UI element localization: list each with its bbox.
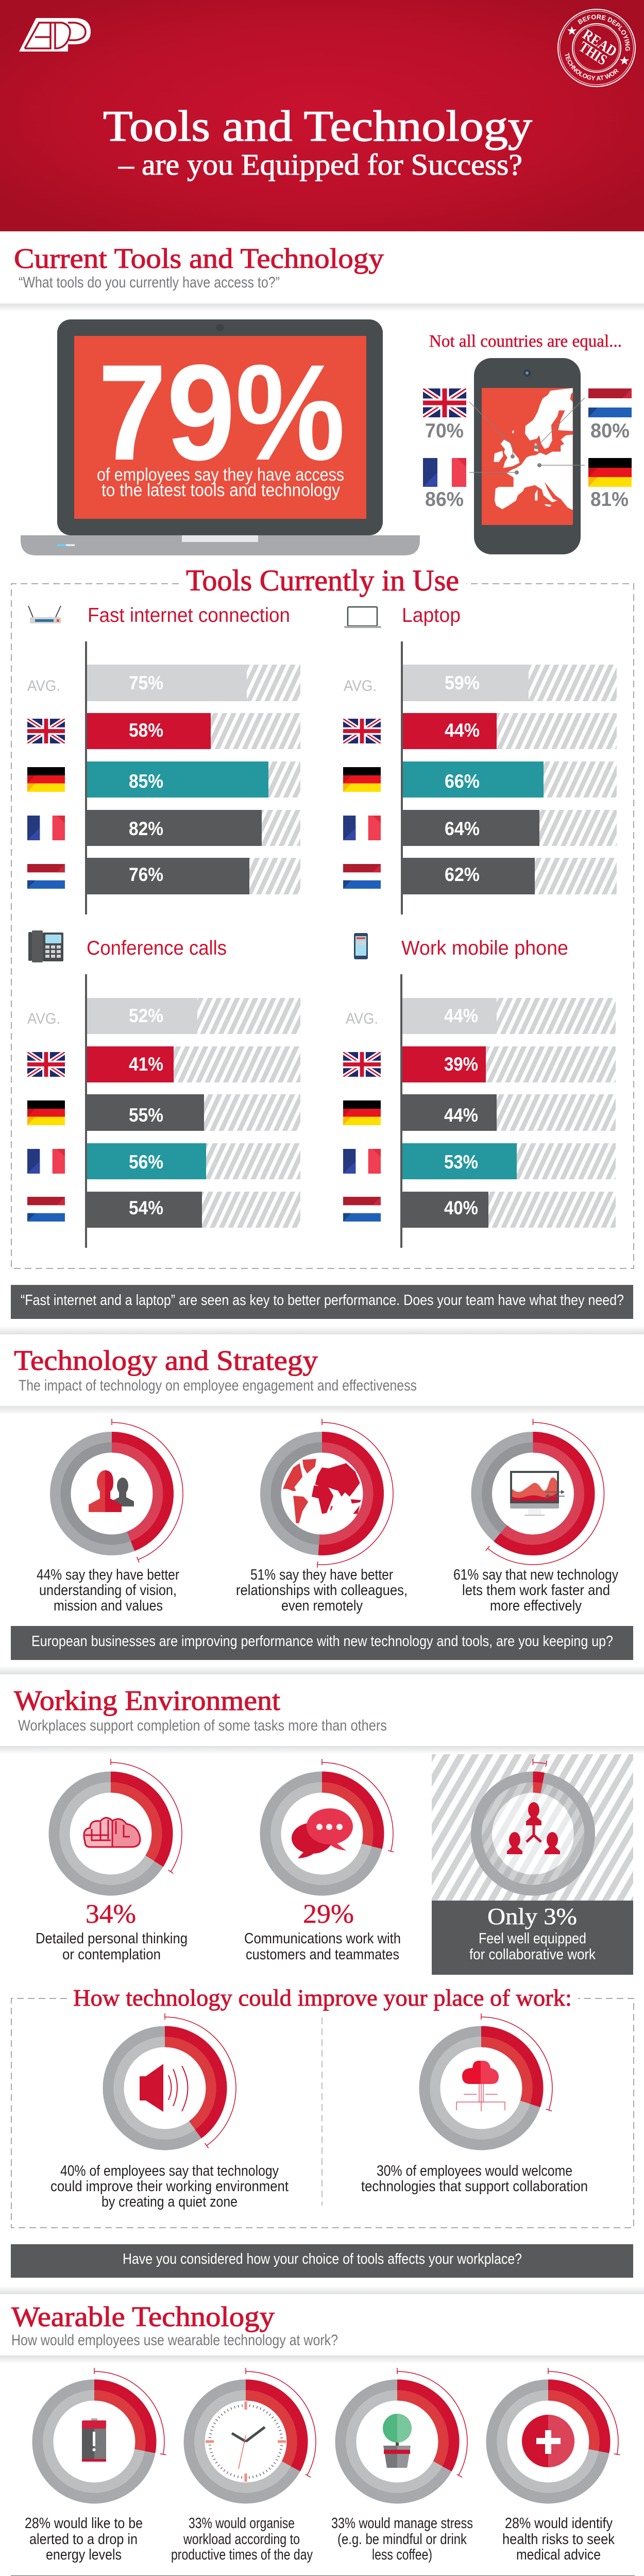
chart: fast internet connection: 58% <box>129 720 163 741</box>
flag: Netherlands 80%: 80% <box>590 420 630 442</box>
donut: 33% organise workload <box>171 2368 316 2563</box>
panel: current tools heading: “What tools do you currently have access to?” <box>19 274 280 291</box>
logo: ADP <box>19 18 91 52</box>
text: 40%: 40% of employees say that technology <box>60 2163 279 2179</box>
country comparison phone: Not all countries are equal... <box>429 332 622 351</box>
callout: wearable tech <box>11 2575 635 2576</box>
text: 33% stress: 33% would manage stress <box>331 2515 473 2532</box>
donut: 34% personal thinking <box>36 1759 188 1963</box>
text: 33% organise: workload according to <box>183 2531 300 2548</box>
chart: conference calls: Conference calls <box>87 937 227 959</box>
donut: 28% energy levels <box>24 2368 166 2563</box>
chart: work mobile phone: AVG. <box>346 1010 378 1027</box>
flag: France 86%: 86% <box>425 488 464 511</box>
text: 40% <box>50 2163 289 2210</box>
chart: laptop: 62% <box>445 864 480 885</box>
callout: fast internet <box>11 1285 633 1319</box>
panel: working environment heading: Workplaces support completion of some tasks more than others <box>18 1717 387 1734</box>
flag: Germany 81% <box>588 458 632 511</box>
text: 28% health: medical advice <box>516 2547 601 2563</box>
icon: chat bubbles <box>292 1808 353 1858</box>
flag: Netherlands 80% <box>588 388 632 442</box>
chart: fast internet connection: 82% <box>129 818 163 839</box>
flag: France 86% <box>423 458 466 511</box>
text: 44%: mission and values <box>54 1598 163 1614</box>
panel: technology and strategy heading: Technology and Strategy <box>14 1345 318 1376</box>
text: 61%: lets them work faster and <box>462 1582 610 1599</box>
map: Europe <box>494 388 573 510</box>
text: 61%: more effectively <box>490 1598 582 1614</box>
icon: three people network <box>507 1802 560 1854</box>
flag: Germany 81%: 81% <box>590 488 629 511</box>
panel: technology and strategy heading <box>0 1326 644 1414</box>
chart: fast internet connection: 75% <box>129 672 163 693</box>
panel: current tools heading <box>0 243 644 312</box>
chart: laptop: Laptop <box>402 604 461 626</box>
stat: 34%: 34% <box>86 1900 136 1929</box>
stamp: read this <box>557 9 636 87</box>
panel: technology and strategy heading: The impact of technology on employee engagement and effectiveness <box>19 1377 417 1394</box>
panel: how technology could improve <box>11 1985 634 2228</box>
stat: 29%: customers and teammates <box>246 1946 399 1963</box>
laptop with 79%: 79% <box>98 336 345 489</box>
text: 33% organise: productive times of the day <box>171 2547 313 2563</box>
callout: choice of tools <box>11 2244 633 2278</box>
text: 33% organise: 33% would organise <box>189 2515 295 2532</box>
panel: header <box>0 0 644 231</box>
box: only 3%: Only 3% <box>487 1903 577 1929</box>
icon: battery <box>82 2418 106 2462</box>
panel: working environment heading: Working Environment <box>14 1685 280 1716</box>
donut: 40% quiet zone <box>50 2013 289 2210</box>
icon: laptop <box>344 607 381 628</box>
icon: brain <box>84 1818 140 1847</box>
chart: conference calls: AVG. <box>27 1010 60 1027</box>
donut: 51% relationships <box>236 1419 408 1614</box>
callout: european businesses <box>11 1626 633 1660</box>
text: 28% health: health risks to seek <box>502 2531 615 2548</box>
text: 40%: by creating a quiet zone <box>101 2194 238 2210</box>
text: 33% organise <box>171 2515 313 2563</box>
chart: laptop <box>343 604 617 914</box>
chart: laptop: 44% <box>445 720 480 741</box>
donut: 33% manage stress <box>327 2368 473 2563</box>
chart: work mobile phone: 44% <box>444 1105 478 1126</box>
chart: work mobile phone: 53% <box>444 1151 478 1173</box>
chart: conference calls: 41% <box>129 1054 163 1075</box>
text: 28% health <box>502 2515 615 2563</box>
donut: 61% faster work <box>453 1419 618 1614</box>
stat: 29%: Communications work with <box>244 1930 401 1947</box>
icon: cloud network <box>456 2061 505 2111</box>
icon: monitor <box>510 1471 565 1516</box>
panel: wearable technology heading: Wearable Technology <box>11 2301 275 2332</box>
chart: fast internet connection: 76% <box>129 864 163 885</box>
stat: 29%: 29% <box>303 1900 354 1929</box>
chart: conference calls <box>27 930 300 1248</box>
text: 30% <box>361 2163 588 2195</box>
stamp: read this: READ <box>580 26 620 60</box>
chart: fast internet connection: Fast internet connection <box>88 604 290 626</box>
icon: clock <box>205 2401 286 2482</box>
chart: conference calls: 52% <box>129 1005 163 1026</box>
panel: only 3% collaborative <box>432 1754 633 1975</box>
country comparison phone <box>423 332 632 554</box>
laptop with 79% <box>21 319 420 555</box>
text: 28% energy: 28% would like to be <box>25 2515 143 2532</box>
stat: 34% <box>36 1900 188 1963</box>
chart: fast internet connection: AVG. <box>27 677 60 694</box>
text: 51%: even remotely <box>281 1598 363 1614</box>
flag: UK 70% <box>423 388 466 442</box>
chart: fast internet connection <box>27 604 300 914</box>
chart: work mobile phone <box>343 933 616 1248</box>
text: 44%: 44% say they have better <box>37 1567 179 1583</box>
text: 61% <box>453 1567 618 1614</box>
chart: fast internet connection: 85% <box>129 771 163 792</box>
chart: conference calls: 55% <box>129 1105 163 1126</box>
map pointers <box>469 398 585 472</box>
heading: tools currently in use: Tools Currently in Use <box>186 564 459 597</box>
text: 44% <box>37 1567 179 1614</box>
stamp: read this: BEFORE DEPLOYING <box>578 14 630 51</box>
chart: work mobile phone: 44% <box>444 1005 478 1026</box>
text: 33% stress <box>331 2515 473 2563</box>
icon: medical cross <box>522 2415 574 2467</box>
flag: UK 70%: 70% <box>425 420 464 442</box>
panel: wearable technology heading: How would employees use wearable technology at work? <box>11 2332 338 2349</box>
text: 51%: relationships with colleagues, <box>236 1582 408 1599</box>
text: 28% health: 28% would identify <box>505 2515 613 2532</box>
panel: wearable technology heading <box>0 2286 644 2364</box>
chart: work mobile phone: 40% <box>444 1197 478 1218</box>
icon: router <box>28 606 61 623</box>
text: 28% energy: alerted to a drop in <box>29 2531 138 2548</box>
panel: working environment heading <box>0 1666 644 1754</box>
chart: work mobile phone: Work mobile phone <box>401 937 568 959</box>
chart: laptop: AVG. <box>344 677 377 694</box>
heading: how technology could improve: How technology could improve your place of work: <box>73 1985 572 2011</box>
box: only 3%: for collaborative work <box>469 1946 596 1963</box>
chart: laptop: 66% <box>445 771 480 792</box>
stamp: read this: THIS <box>576 39 610 69</box>
callout: choice of tools: Have you considered how your choice of tools affects your workplace? <box>123 2251 522 2267</box>
text: 51% <box>236 1567 408 1614</box>
text: 51%: 51% say they have better <box>250 1567 393 1583</box>
text: 44%: understanding of vision, <box>39 1582 177 1599</box>
panel: tools currently in use <box>11 564 634 1268</box>
icon: globe <box>283 1459 361 1523</box>
chart: laptop: 64% <box>445 818 480 839</box>
laptop with 79%: of employees say they have access <box>97 465 344 485</box>
text: 28% energy <box>25 2515 143 2563</box>
stat: 34%: Detailed personal thinking <box>36 1930 188 1947</box>
chart: laptop: 59% <box>445 672 480 693</box>
text: 28% energy: energy levels <box>46 2547 122 2563</box>
laptop with 79%: to the latest tools and technology <box>101 480 340 500</box>
panel: current tools heading: Current Tools and Technology <box>14 243 384 274</box>
stat: 34%: or contemplation <box>62 1946 161 1963</box>
box: only 3% <box>432 1901 633 1975</box>
text: 40%: could improve their working environment <box>50 2178 289 2195</box>
stat: 29% <box>244 1900 401 1963</box>
text: 33% stress: less coffee) <box>372 2547 432 2563</box>
text: 30%: technologies that support collaboration <box>361 2178 588 2195</box>
icon: mobile phone <box>354 933 368 959</box>
title: Tools and Technology <box>103 102 533 150</box>
text: 61%: 61% say that new technology <box>453 1567 618 1583</box>
icon: desk phone <box>28 930 63 962</box>
subtitle: – are you Equipped for Success? <box>118 148 522 181</box>
donut: 28% health risks <box>478 2368 620 2563</box>
chart: work mobile phone: 39% <box>444 1054 478 1075</box>
icon: speaker <box>140 2064 188 2112</box>
text: 30%: 30% of employees would welcome <box>377 2163 572 2179</box>
text: 33% stress: (e.g. be mindful or drink <box>337 2531 467 2548</box>
icon: people <box>89 1470 134 1512</box>
chart: conference calls: 56% <box>129 1151 163 1173</box>
chart: conference calls: 54% <box>129 1197 163 1218</box>
box: only 3%: Feel well equipped <box>479 1930 586 1947</box>
donut: 29% communications <box>244 1759 401 1963</box>
donut: 44% vision <box>37 1419 183 1614</box>
donut: 30% collaboration <box>361 2013 588 2195</box>
icon: plant <box>383 2414 412 2468</box>
